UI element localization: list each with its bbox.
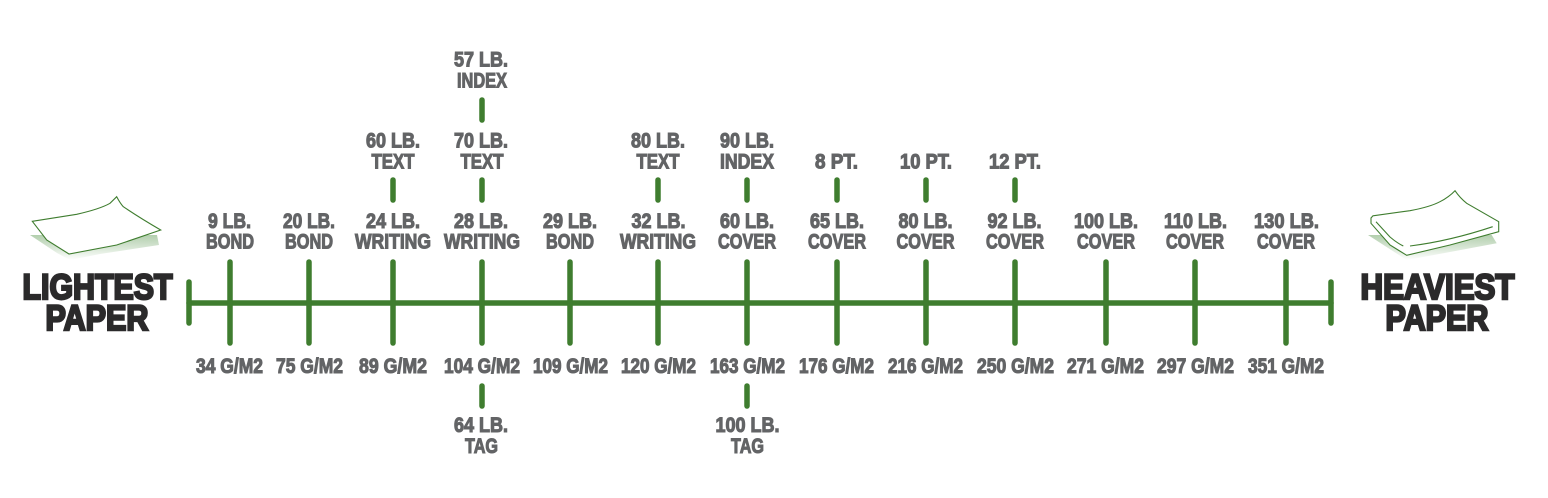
metric weights row: 109 G/M2 [533,355,608,378]
label: 64 lb tag: TAG [465,435,498,458]
label: 32 lb writing [620,210,696,254]
connector ticks above the axis [393,100,1015,200]
label: 29 lb bond: 29 LB. [543,210,597,233]
label: 90 lb index: 90 LB. [720,130,774,152]
label: 64 lb tag [454,414,508,458]
label: 100 lb cover: COVER [1077,230,1135,254]
label: 90 lb index: INDEX [720,150,774,174]
label: 80 lb cover: 80 LB. [898,210,952,233]
label: 110 lb cover [1164,210,1227,254]
label: 80 lb cover [896,210,954,254]
label: 80 lb text [631,130,685,174]
label: 80 lb text: 80 LB. [631,130,685,152]
label: 110 lb cover: COVER [1166,230,1224,254]
axis: paper weight timeline [189,262,1331,343]
label: 80 lb cover: COVER [896,230,954,254]
label: 100 lb tag: 100 LB. [716,414,780,437]
label: 32 lb writing: WRITING [620,230,696,254]
label: 130 lb cover [1254,210,1319,254]
label: 65 lb cover [808,210,866,254]
label: 28 lb writing [444,210,520,254]
metric weights row: 104 G/M2 [444,355,520,378]
label: 57 lb index [454,48,508,92]
label: 65 lb cover: COVER [808,230,866,254]
metric weights row: 120 G/M2 [621,355,696,378]
label: 70 lb text [454,130,508,174]
label: 60 lb text [366,130,420,174]
metric weights row: 250 G/M2 [977,355,1054,378]
label: 29 lb bond [543,210,597,254]
label: 24 lb writing: WRITING [355,230,431,254]
metric weights row: 75 G/M2 [276,355,343,378]
label: 24 lb writing: 24 LB. [366,210,420,233]
icon: stack of paper [1368,191,1499,260]
label: 20 lb bond: 20 LB. [283,210,335,233]
label: 8 pt: 8 PT. [815,150,858,174]
label: 9 lb bond: BOND [206,230,254,254]
label: 60 lb cover: 60 LB. [720,210,774,233]
metric weights row: 176 G/M2 [799,355,874,378]
heading: heaviest paper [1360,268,1514,338]
metric weights row: 216 G/M2 [888,355,963,378]
label: 9 lb bond [206,210,254,254]
heading: heaviest paper: HEAVIEST [1360,268,1514,307]
label: 64 lb tag: 64 LB. [454,414,508,437]
heading: lightest paper [22,268,172,338]
label: 20 lb bond: BOND [285,230,333,254]
metric weights row: 351 G/M2 [1248,355,1324,378]
label: 70 lb text: TEXT [460,150,504,174]
label: 92 lb cover: COVER [986,230,1044,254]
label: 70 lb text: 70 LB. [454,130,508,152]
label: 9 lb bond: 9 LB. [208,210,251,233]
heading: heaviest paper: PAPER [1386,299,1488,338]
label: 28 lb writing: WRITING [444,230,520,254]
label: 57 lb index: INDEX [457,70,507,92]
label: 100 lb cover: 100 LB. [1074,210,1138,233]
label: 130 lb cover: COVER [1257,230,1315,254]
label: 110 lb cover: 110 LB. [1164,210,1227,233]
metric weights row: 89 G/M2 [359,355,427,378]
label: 24 lb writing [355,210,431,254]
label: 90 lb index [720,130,774,174]
heading: lightest paper: PAPER [46,299,148,338]
label: 100 lb tag [716,414,780,458]
label: 100 lb tag: TAG [731,435,764,458]
label: 100 lb cover [1074,210,1138,254]
label: 92 lb cover [986,210,1044,254]
connector ticks below the axis [482,386,747,406]
label: 60 lb cover [718,210,776,254]
metric weights row: 297 G/M2 [1157,355,1234,378]
label: 60 lb cover: COVER [718,230,776,254]
label: 28 lb writing: 28 LB. [454,210,508,233]
label: 60 lb text: 60 LB. [366,130,420,152]
metric weights row: 163 G/M2 [710,355,785,378]
label: 29 lb bond: BOND [546,230,594,254]
metric weights row: 271 G/M2 [1067,355,1144,378]
label: 32 lb writing: 32 LB. [632,210,686,233]
icon: single sheet of paper [30,197,161,260]
label: 10 pt: 10 PT. [900,150,952,174]
label: 12 pt: 12 PT. [989,150,1041,174]
label: 20 lb bond [283,210,335,254]
metric weights row: 34 G/M2 [196,355,263,378]
heading: lightest paper: LIGHTEST [22,268,172,307]
label: 60 lb text: TEXT [372,150,415,174]
metric weights row [196,355,1324,378]
label: 92 lb cover: 92 LB. [988,210,1042,233]
label: 57 lb index: 57 LB. [454,48,508,72]
label: 130 lb cover: 130 LB. [1254,210,1319,233]
label: 65 lb cover: 65 LB. [810,210,864,233]
label: 80 lb text: TEXT [636,150,680,174]
